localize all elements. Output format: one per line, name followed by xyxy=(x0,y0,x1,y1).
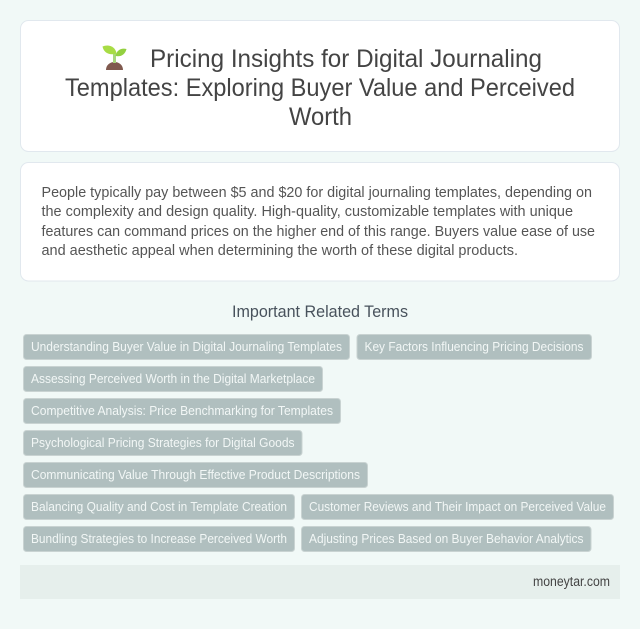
chip: psychological pricing: Psychological Pricing Strategies for Digital Goods xyxy=(31,435,295,450)
chip: adjusting prices xyxy=(302,526,591,552)
chip: buyer value xyxy=(24,334,350,360)
chip: competitive analysis: Competitive Analysis: Price Benchmarking for Templates xyxy=(31,403,333,418)
title: Worth xyxy=(289,103,352,131)
chip: communicating value xyxy=(24,462,368,488)
chip: psychological pricing xyxy=(24,430,302,456)
chip: quality and cost xyxy=(24,494,294,520)
chip: bundling xyxy=(24,526,294,552)
summary text: the complexity and design quality. High-quality, customizable templates with unique xyxy=(42,203,573,220)
chip: key factors xyxy=(357,334,592,360)
chip: communicating value: Communicating Value Through Effective Product Descriptions xyxy=(31,467,360,482)
chip: customer reviews: Customer Reviews and Their Impact on Perceived Value xyxy=(309,499,606,514)
chip: competitive analysis xyxy=(24,398,340,424)
chip: adjusting prices: Adjusting Prices Based on Buyer Behavior Analytics xyxy=(309,531,584,546)
summary text xyxy=(42,184,595,259)
chip: customer reviews xyxy=(302,494,614,520)
chip: buyer value: Understanding Buyer Value in Digital Journaling Templates xyxy=(31,339,342,354)
chip: perceived worth xyxy=(24,366,322,392)
footer xyxy=(20,565,620,599)
chip: quality and cost: Balancing Quality and Cost in Template Creation xyxy=(31,499,287,514)
icon: seedling xyxy=(102,45,126,70)
chip: key factors: Key Factors Influencing Pricing Decisions xyxy=(364,339,584,354)
summary text: features can command prices on the higher end of this range. Buyers value ease of use xyxy=(42,223,595,240)
summary text: and aesthetic appeal when determining the worth of these digital products. xyxy=(42,242,518,259)
title xyxy=(65,45,575,131)
panel: title card xyxy=(20,20,620,152)
summary text: People typically pay between $5 and $20 for digital journaling templates, depending on xyxy=(42,184,592,201)
term chips xyxy=(24,334,614,552)
panel: summary card xyxy=(20,162,620,281)
chip: perceived worth: Assessing Perceived Worth in the Digital Marketplace xyxy=(31,371,315,386)
chip: bundling: Bundling Strategies to Increase Perceived Worth xyxy=(31,531,287,546)
title: Pricing Insights for Digital Journaling xyxy=(150,45,542,73)
heading: related terms: Important Related Terms xyxy=(232,302,408,321)
title: Templates: Exploring Buyer Value and Perceived xyxy=(65,74,575,102)
footer source: moneytar.com xyxy=(533,574,610,589)
